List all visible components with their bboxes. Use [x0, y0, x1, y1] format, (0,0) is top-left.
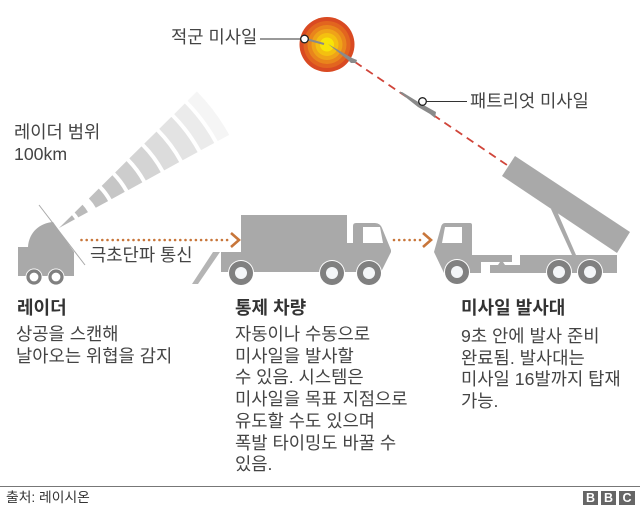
label: radar range: 100km — [14, 144, 67, 164]
text: launcher description: 가능. — [461, 391, 498, 411]
missile launcher truck — [434, 156, 630, 285]
arrow: radar to control truck — [82, 233, 239, 247]
text: launcher description: 9초 안에 발사 준비 — [461, 326, 600, 346]
label: radar range — [14, 122, 100, 164]
radar vehicle — [18, 205, 85, 286]
text: control vehicle description — [235, 324, 408, 474]
text: launcher description — [461, 326, 621, 411]
radar beam — [43, 90, 231, 250]
heading: launcher: 미사일 발사대 — [461, 298, 565, 318]
leader: patriot missile — [419, 98, 467, 105]
text: control vehicle description: 미사일을 발사할 — [235, 346, 354, 366]
text: control vehicle description: 미사일을 목표 지점으로 — [235, 389, 408, 409]
text: radar description: 날아오는 위협을 감지 — [16, 346, 172, 366]
label: radar range: 레이더 범위 — [14, 122, 100, 142]
source: 출처: 레이시온 — [6, 490, 90, 505]
text: control vehicle description: 있음. — [235, 454, 272, 474]
explosion — [300, 17, 354, 72]
BBC logo: B — [604, 491, 613, 505]
text: control vehicle description: 유도할 수도 있으며 — [235, 411, 375, 431]
text: launcher description: 완료됨. 발사대는 — [461, 348, 585, 368]
control truck — [192, 215, 391, 286]
enemy missile — [306, 39, 357, 63]
heading: control vehicle: 통제 차량 — [235, 298, 306, 318]
patriot missile — [399, 92, 436, 118]
BBC logo — [583, 491, 635, 505]
footer rule — [0, 486, 640, 488]
text: control vehicle description: 자동이나 수동으로 — [235, 324, 370, 344]
text: control vehicle description: 수 있음. 시스템은 — [235, 367, 364, 387]
BBC logo: B — [586, 491, 595, 505]
BBC logo: C — [622, 491, 632, 505]
label: enemy missile: 적군 미사일 — [171, 27, 257, 47]
arrow: control truck to launcher — [394, 233, 431, 247]
text: radar description: 상공을 스캔해 — [16, 324, 119, 344]
heading: radar: 레이더 — [17, 298, 67, 318]
label: patriot missile: 패트리엇 미사일 — [470, 91, 589, 111]
leader: enemy missile — [260, 35, 308, 43]
text: radar description — [16, 324, 172, 366]
missile trajectory — [355, 62, 507, 165]
label: UHF communication: 극초단파 통신 — [90, 245, 193, 265]
text: launcher description: 미사일 16발까지 탑재 — [461, 369, 621, 389]
text: control vehicle description: 폭발 타이밍도 바꿀 수 — [235, 433, 396, 453]
